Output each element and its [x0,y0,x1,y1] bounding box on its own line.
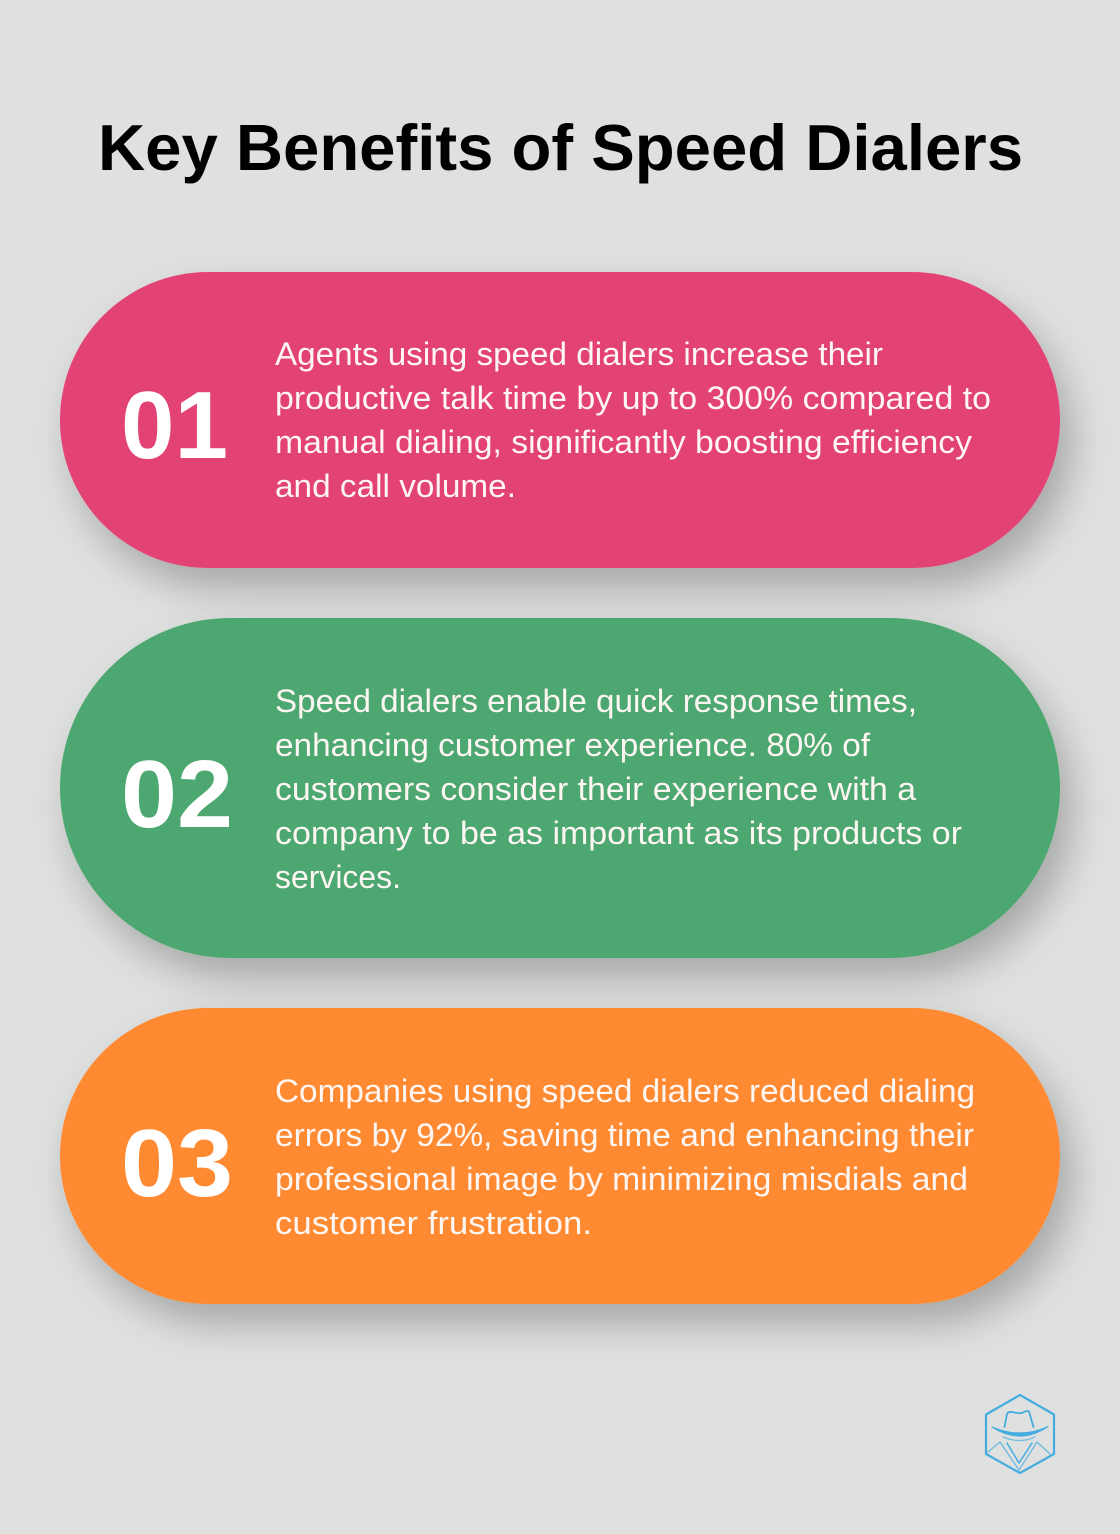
text block: dialing errors: customer frustration. [275,1205,592,1241]
text block: customer experience: Speed dialers enable quick response times, [275,683,917,719]
text block: customer experience: customers consider their experience with a [275,771,916,807]
text block: customer experience: company to be as important as its products or [275,815,962,851]
text block: dialing errors: Companies using speed dialers reduced dialing [275,1073,975,1109]
panel: benefit 03 [60,1008,1060,1304]
pill background green [60,618,1060,958]
pill background pink [60,272,1060,568]
text block: productive talk time: productive talk time by up to 300% compared to [275,380,991,416]
title: Key Benefits of Speed Dialers [98,111,1023,184]
panel: benefit 02 [60,618,1060,958]
text block: customer experience: enhancing customer experience. 80% of [275,727,870,763]
number 01: 01 [121,372,228,479]
text block: productive talk time [275,336,991,504]
text block: productive talk time: and call volume. [275,468,516,504]
icon: spy logo [986,1395,1054,1473]
number 03: 03 [121,1110,233,1217]
text block: productive talk time: Agents using speed dialers increase their [275,336,883,372]
panel: benefit 01 [60,272,1060,568]
text block: dialing errors: errors by 92%, saving time and enhancing their [275,1117,974,1153]
text block: dialing errors: professional image by minimizing misdials and [275,1161,968,1197]
text block: productive talk time: manual dialing, significantly boosting efficiency [275,424,972,460]
text block: customer experience [275,683,962,895]
text block: dialing errors [275,1073,975,1241]
text block: customer experience: services. [275,859,401,895]
pill background orange [60,1008,1060,1304]
number 02: 02 [121,741,233,848]
